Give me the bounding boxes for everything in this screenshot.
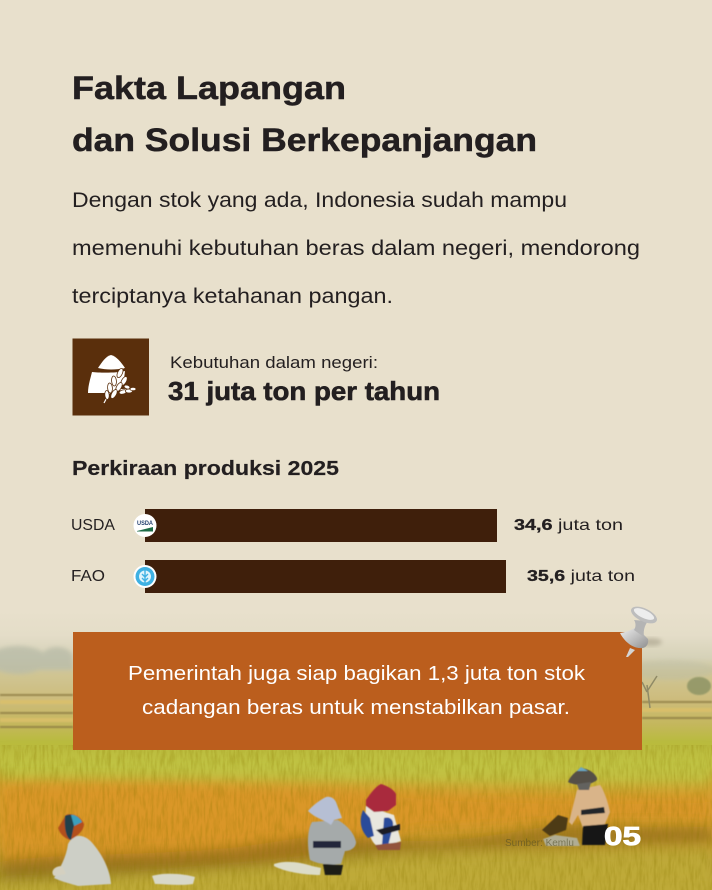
title: Fakta Lapangan	[72, 70, 346, 106]
value: USDA: 34,6 juta ton	[514, 517, 623, 534]
chart heading: Perkiraan produksi 2025	[72, 457, 339, 480]
tree silhouettes	[642, 676, 657, 708]
stat: domestic need	[168, 354, 440, 406]
callout	[73, 632, 642, 750]
farmer 2	[308, 797, 356, 875]
title	[72, 70, 537, 158]
icon: rice sack	[72, 338, 149, 416]
cloth bundle	[152, 874, 195, 885]
bar: USDA	[71, 509, 623, 542]
callout: cadangan beras untuk menstabilkan pasar.	[142, 696, 570, 719]
title: dan Solusi Berkepanjangan	[72, 122, 537, 158]
cloth bundle	[274, 862, 321, 875]
orange ripe rice band	[0, 755, 712, 868]
farmer 1	[52, 814, 111, 886]
intro paragraph	[72, 188, 640, 308]
farmer 4 with conical hat	[542, 767, 610, 846]
bar: FAO	[71, 560, 635, 593]
farmer 3	[361, 784, 401, 850]
intro paragraph: Dengan stok yang ada, Indonesia sudah mampu	[72, 188, 567, 212]
icon: USDA logo: USDA	[137, 521, 154, 527]
icon: FAO logo	[134, 565, 156, 588]
intro paragraph: memenuhi kebutuhan beras dalam negeri, mendorong	[72, 236, 640, 260]
page number: 05	[604, 821, 641, 851]
shaded rice rows	[0, 824, 712, 890]
stat: domestic need: Kebutuhan dalam negeri:	[170, 354, 378, 372]
photo: rice field with farmers	[0, 610, 712, 890]
callout: Pemerintah juga siap bagikan 1,3 juta ton stok	[128, 662, 586, 685]
icon: push pin	[620, 603, 662, 657]
intro paragraph: terciptanya ketahanan pangan.	[72, 284, 393, 308]
stat: domestic need: 31 juta ton per tahun	[168, 376, 440, 406]
source credit: Sumber: Kemlu	[505, 838, 574, 849]
field terraces	[0, 695, 712, 727]
bar: USDA: USDA	[71, 517, 116, 534]
icon: USDA logo	[134, 514, 156, 537]
value: FAO: 35,6 juta ton	[527, 568, 635, 585]
bar: FAO: FAO	[71, 568, 105, 585]
distant tree line	[0, 646, 712, 680]
grass texture	[0, 745, 712, 890]
